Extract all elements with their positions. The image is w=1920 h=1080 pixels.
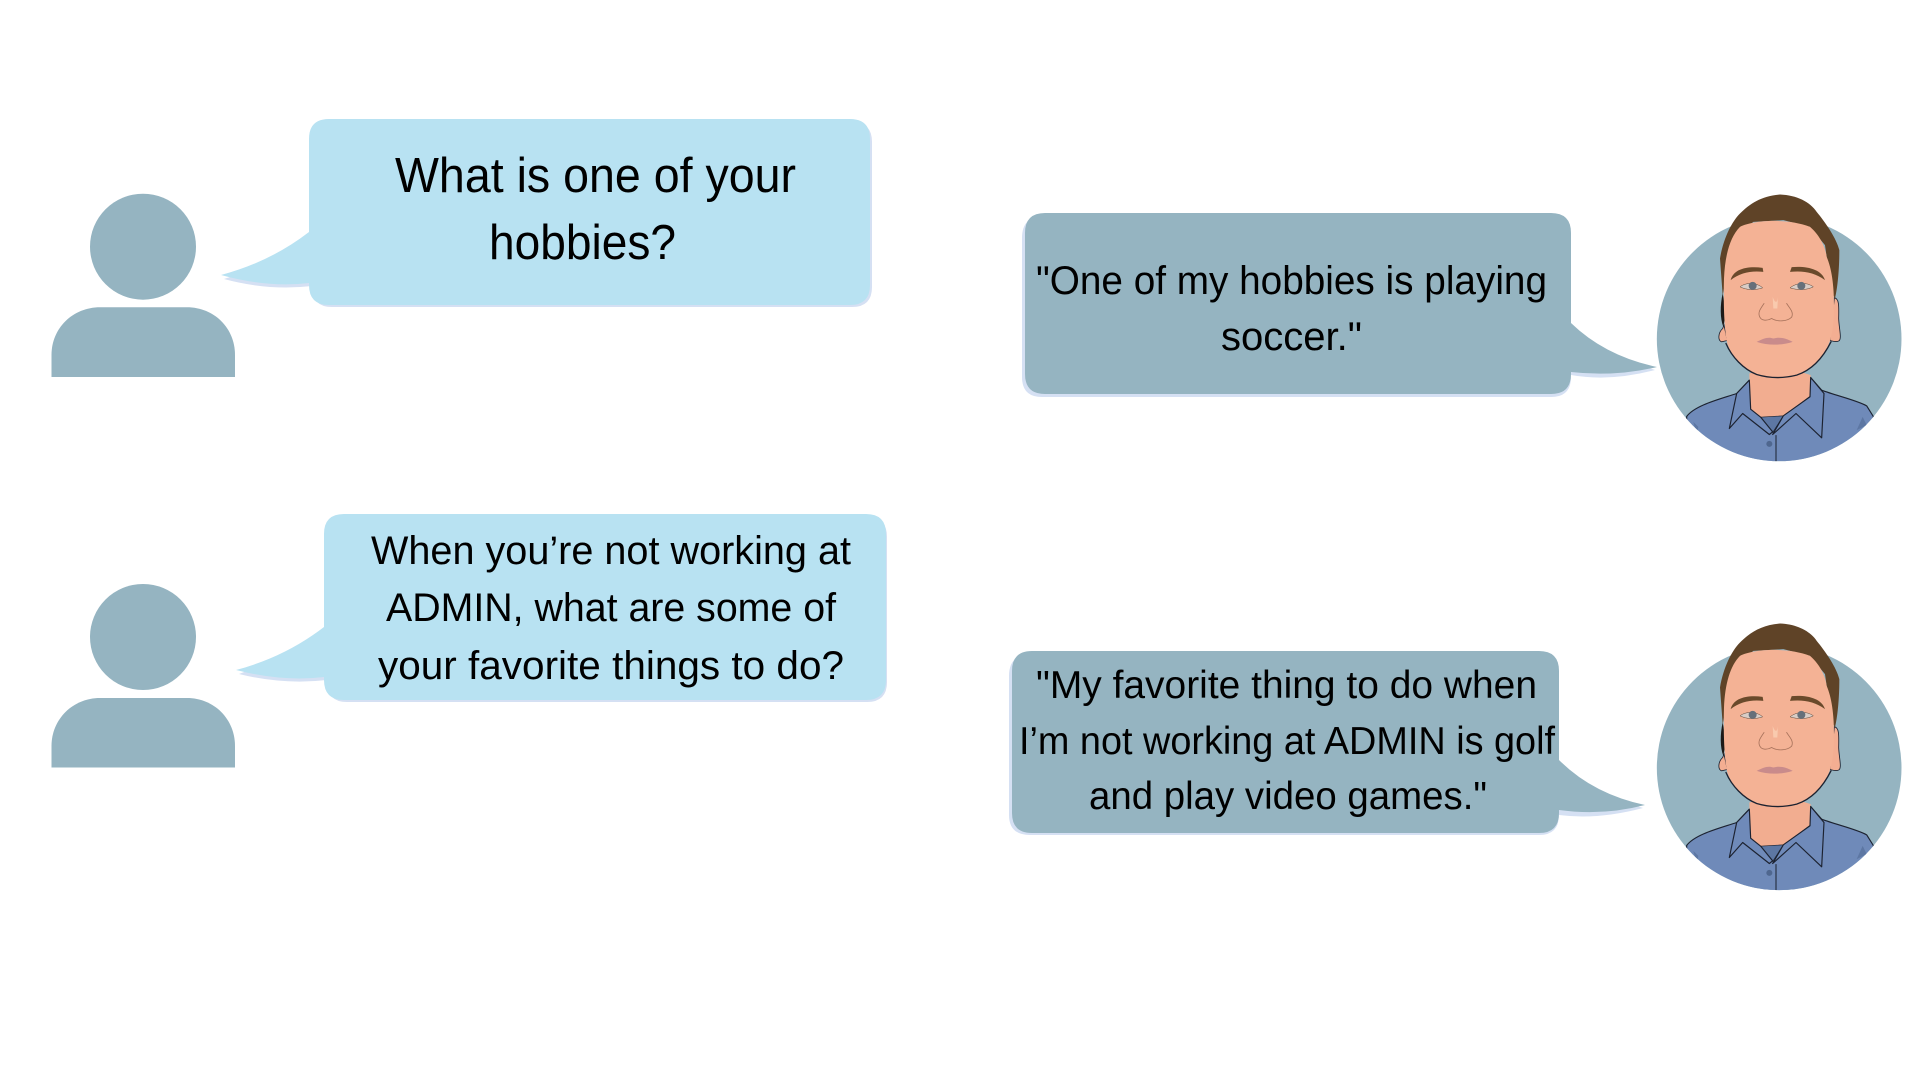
person icon: bottom interviewer xyxy=(52,584,235,768)
answer text: "One of my hobbies is playing xyxy=(1036,259,1547,303)
question text: your favorite things to do? xyxy=(378,644,844,688)
person icon: top interviewer xyxy=(52,194,235,377)
answer text: "My favorite thing to do when xyxy=(1036,664,1537,707)
question text: When you’re not working at xyxy=(371,529,851,573)
question text: What is one of your xyxy=(395,149,796,203)
answer text: soccer." xyxy=(1221,315,1362,359)
answer bubble: golf and video games xyxy=(1009,651,1645,835)
portrait: top respondent xyxy=(1657,194,1901,478)
portrait: bottom respondent xyxy=(1657,623,1901,907)
answer bubble: soccer xyxy=(1022,213,1657,397)
answer text: and play video games." xyxy=(1089,775,1487,818)
question bubble: favorite things xyxy=(236,514,887,702)
answer text: I’m not working at ADMIN is golf xyxy=(1019,720,1555,763)
question bubble: hobbies xyxy=(221,119,872,307)
question text: hobbies? xyxy=(489,216,676,270)
question text: ADMIN, what are some of xyxy=(386,586,837,630)
